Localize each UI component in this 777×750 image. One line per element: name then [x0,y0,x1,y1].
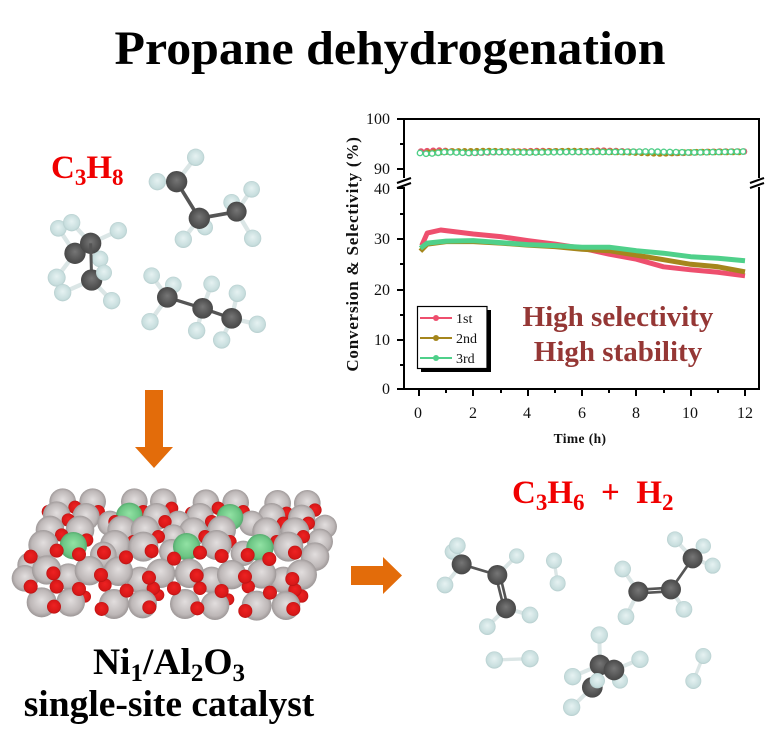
nickel sites, back [116,503,243,531]
catalyst label: O [203,642,233,683]
line chart: conversion and selectivity [343,111,764,446]
y-axis tick labels: 10 [374,332,390,349]
product label: C3H6 + H2: 6 [573,490,585,515]
legend: 3rd [456,352,475,367]
molecule: propene bottom [563,626,649,716]
catalyst label: Ni [93,642,130,683]
legend: 2nd [456,332,477,347]
x-axis tick labels: 0 [414,405,422,422]
product label: C3H6 + H2: + H [585,475,662,511]
product label: C3H6 + H2: 3 [536,490,547,515]
conversion series: 1st run [422,230,745,276]
molecule: hydrogen right [685,648,711,689]
catalyst label: /Al [142,642,191,683]
product label: C3H6 + H2: 2 [662,490,674,515]
propane molecules [48,149,266,349]
x-axis tick labels: 4 [523,405,531,422]
y-axis tick labels: 100 [366,111,390,128]
product label: C3H6 + H2: C [512,475,536,511]
conversion series: 2nd run [420,242,745,272]
chart callout: High stability [534,336,703,368]
arrow: right [351,557,402,594]
reactant label: C3H8: 8 [112,165,124,190]
molecule: propene left [437,537,538,635]
product molecules [437,531,721,716]
chart callout: High selectivity [523,301,714,333]
reactant label: C3H8: H [86,150,112,186]
x-axis tick labels: 12 [737,405,753,422]
title: Propane dehydrogenation [114,22,666,75]
arrow: down [135,390,173,468]
conversion series: 3rd run [420,241,745,261]
chart callout [523,301,714,368]
legend [418,306,491,372]
y-axis tick labels: 90 [374,161,390,178]
nickel sites, front [60,532,274,561]
legend: 1st [456,312,472,327]
x-axis tick labels: 2 [469,405,477,422]
catalyst label: 3 [233,660,245,687]
molecule: hydrogen left [486,650,539,669]
molecule: propane upper right [149,149,261,248]
y-axis tick labels: 20 [374,282,390,299]
catalyst label: 1 [130,660,143,687]
x-axis tick labels [414,405,753,422]
molecule: propane left [48,214,127,309]
x-axis tick labels: 6 [578,405,586,422]
catalyst label: single-site catalyst [24,684,315,725]
x-axis title: Time (h) [554,431,606,446]
catalyst label: 2 [191,660,203,687]
y-axis title: Conversion & Selectivity (%) [343,136,362,372]
reactant label: C3H8: 3 [75,165,86,190]
molecule: propane lower right [141,267,266,349]
catalyst label [24,642,315,725]
x-axis tick labels: 10 [682,405,698,422]
y-axis tick labels: 30 [374,231,390,248]
selectivity series, open circles [420,150,745,154]
molecule: propene right [614,531,721,625]
y-axis tick labels: 40 [374,181,390,198]
x-axis tick labels: 8 [632,405,640,422]
y-axis tick labels [366,111,390,398]
plot axes [397,119,764,396]
catalyst surface model [12,488,337,621]
product label: C3H6 + H2: H [547,475,573,511]
reactant label: C3H8: C [51,150,75,186]
molecule: hydrogen top [546,553,566,591]
y-axis tick labels: 0 [382,381,390,398]
